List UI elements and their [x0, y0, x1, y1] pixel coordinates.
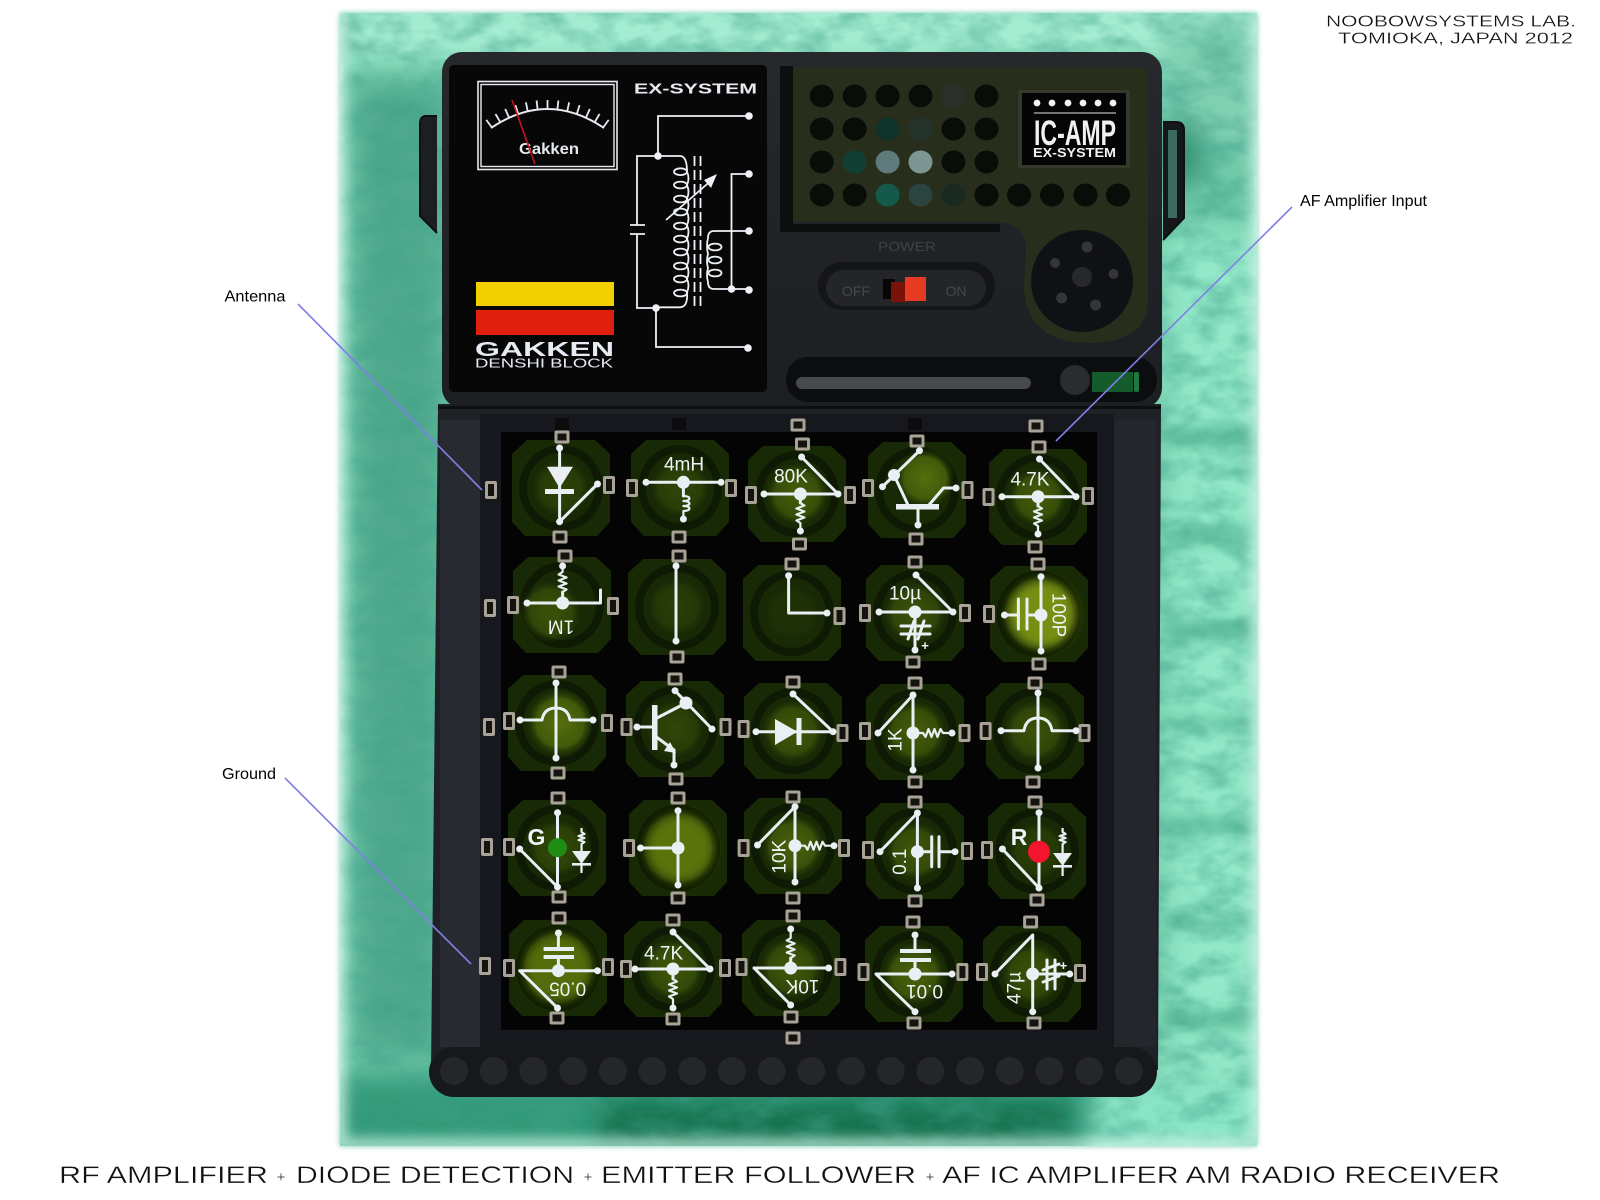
power switch: POWER [878, 239, 936, 254]
block: 10K resistor 2 [736, 910, 846, 1044]
block: 10µ capacitor [859, 556, 971, 668]
block: green LED: G [528, 824, 545, 850]
grille holes [810, 84, 1130, 206]
meter [478, 82, 617, 170]
block: 1M resistor: 1M [548, 616, 574, 636]
block: 100P capacitor [983, 558, 1088, 670]
block: 0.05 capacitor [479, 912, 614, 1024]
block: 0.05 capacitor: 0.05 [549, 978, 586, 998]
credit text: NOOBOWSYSTEMS LAB. [1326, 14, 1576, 30]
lower body [431, 404, 1161, 1070]
block: 0.01 capacitor: 0.01 [906, 980, 943, 1001]
block: 4.7K resistor 2 [620, 914, 731, 1026]
block: 4mH inductor [626, 440, 737, 544]
top terminal row [555, 418, 1044, 432]
block: 10K resistor 2: 10K [785, 975, 819, 996]
block: red LED: R [1011, 824, 1028, 850]
block: crossing wires 2 [980, 676, 1090, 788]
callout: AF Amplifier Input [1056, 193, 1428, 441]
block: 4.7K resistor 2: 4.7K [644, 944, 683, 964]
IC-AMP badge [1018, 90, 1130, 168]
title: + [584, 1169, 593, 1186]
block: 4mH inductor: 4mH [664, 454, 704, 476]
label panel [449, 65, 767, 392]
callout: Ground [222, 766, 471, 964]
logo: GAKKEN: GAKKEN [475, 339, 614, 361]
title: EMITTER FOLLOWER [601, 1162, 916, 1189]
left side rail [440, 420, 480, 1047]
speaker grille plate [780, 66, 1148, 343]
block: 100P capacitor: 100P [1048, 593, 1068, 637]
block: 0.1 capacitor [862, 796, 973, 908]
speaker [1025, 225, 1139, 339]
upper body [442, 52, 1162, 408]
block: straight wire [628, 550, 726, 664]
credit text: TOMIOKA, JAPAN 2012 [1338, 30, 1573, 48]
block: diode 2 [738, 676, 848, 779]
block: red LED [981, 796, 1086, 906]
callout: Antenna [224, 288, 482, 490]
block: 10µ capacitor: + [921, 638, 929, 653]
bottom rail [429, 1047, 1157, 1097]
block: 0.01 capacitor [858, 916, 968, 1030]
power switch: OFF [842, 283, 870, 299]
block: crossing wires 1 [483, 666, 613, 780]
title: RF AMPLIFIER [59, 1162, 268, 1189]
callout: Antenna: Antenna [224, 288, 286, 306]
block: diode [485, 430, 615, 544]
title: + [926, 1169, 935, 1186]
power switch: ON [946, 283, 966, 299]
red bar [476, 310, 614, 335]
block: 1K resistor [859, 676, 970, 788]
title: DIODE DETECTION [296, 1162, 574, 1189]
black component panel [501, 432, 1097, 1030]
block: 47µ capacitor: 47µ [1004, 972, 1026, 1004]
block: 10µ capacitor: 10µ [889, 584, 921, 604]
block: transistor 2 [620, 672, 732, 786]
heading: EX-SYSTEM: EX-SYSTEM [634, 80, 757, 98]
block: 47µ capacitor: + [1060, 958, 1068, 973]
frame inner recess [480, 414, 1114, 1047]
IC-AMP badge: EX-SYSTEM [1033, 146, 1116, 160]
photo background: green fur [330, 0, 1270, 1165]
IC-AMP badge: IC-AMP [1034, 114, 1116, 153]
divider line [438, 406, 1161, 409]
power switch [818, 239, 995, 310]
block: 0.1 capacitor: 0.1 [890, 848, 911, 875]
block: 10K resistor [738, 790, 850, 904]
block: corner wire [743, 558, 846, 661]
title: AF IC AMPLIFER AM RADIO RECEIVER [942, 1162, 1500, 1189]
yellow bar [476, 282, 614, 306]
block: 47µ capacitor [976, 916, 1086, 1030]
block: 4.7K resistor [982, 440, 1094, 554]
side clips [420, 116, 1184, 240]
logo: DENSHI BLOCK: DENSHI BLOCK [475, 356, 614, 370]
block: transistor [862, 434, 974, 546]
block: 10K resistor: 10K [769, 839, 790, 874]
device body [420, 52, 1184, 1070]
block: 1M resistor [484, 550, 619, 653]
block: green LED [481, 792, 606, 904]
meter: Gakken [519, 141, 579, 158]
callout: AF Amplifier Input: AF Amplifier Input [1300, 193, 1428, 210]
block: 4.7K resistor: 4.7K [1010, 470, 1050, 490]
right side rail [1114, 420, 1156, 1047]
tuning slider [786, 357, 1157, 402]
title [59, 1162, 1500, 1189]
title: + [277, 1169, 286, 1186]
block: T junction [623, 792, 727, 904]
block: 1K resistor: 1K [886, 728, 906, 752]
block: 80K resistor [745, 438, 856, 550]
credit text [1326, 14, 1576, 48]
callout: Ground: Ground [222, 766, 276, 783]
coil schematic [630, 112, 753, 352]
block: 80K resistor: 80K [774, 466, 808, 488]
